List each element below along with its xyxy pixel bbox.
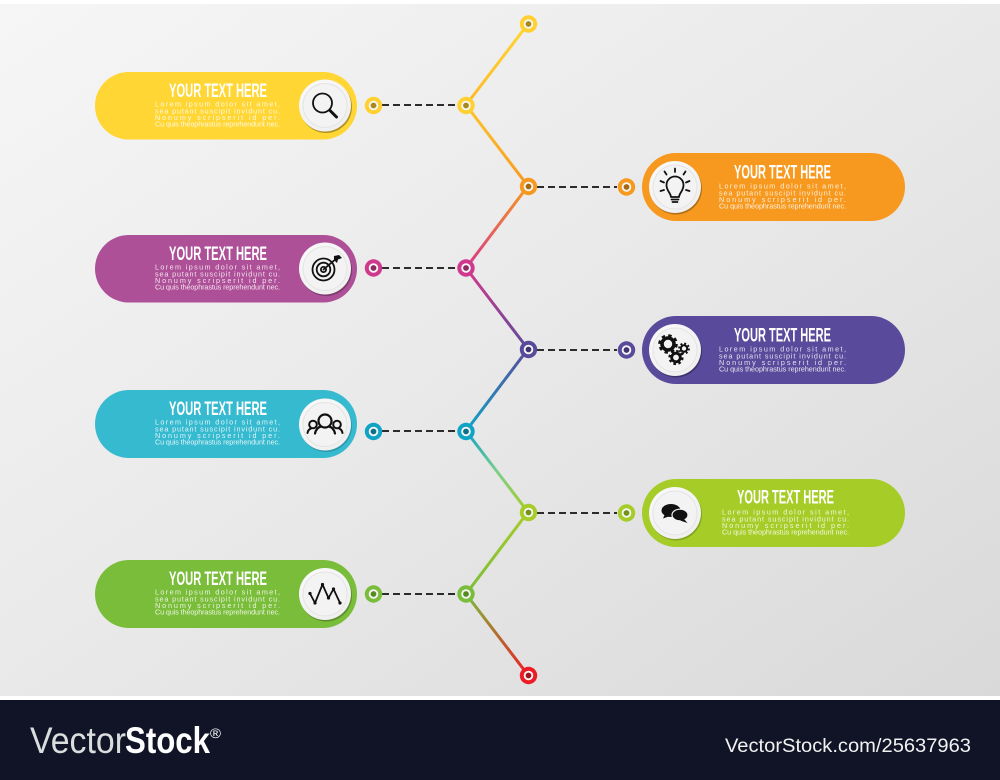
- text block: Lorem ipsum dolor sit amet,: [155, 100, 280, 108]
- text block: Nonumy scripserit id per.: [722, 521, 849, 530]
- node: trunk green: [457, 585, 475, 603]
- text block: Nonumy scripserit id per.: [719, 358, 846, 367]
- node: outer lime: [618, 504, 635, 522]
- panel: orange idea: [642, 153, 905, 221]
- node: outer teal: [365, 423, 382, 440]
- icon: magnifier: [299, 80, 352, 133]
- text block: Lorem ipsum dolor sit amet,: [155, 588, 280, 596]
- text block: Nonumy scripserit id per.: [719, 195, 846, 204]
- icon: gears: [649, 324, 702, 378]
- text block: Lorem ipsum dolor sit amet,: [155, 262, 280, 272]
- text block: Cu quis theophrastus reprehendunt nec.: [155, 282, 280, 292]
- panel: violet settings: [642, 316, 905, 384]
- node: outer orange: [618, 178, 635, 196]
- text block: [155, 262, 280, 292]
- node: outer magenta: [365, 259, 382, 277]
- text block: Cu quis theophrastus reprehendunt nec.: [719, 364, 846, 374]
- panel: lime chat: [642, 479, 905, 547]
- text block: Nonumy scripserit id per.: [155, 276, 280, 285]
- text block: [719, 182, 846, 210]
- icon: target: [299, 242, 352, 296]
- node: trunk orange: [520, 178, 537, 195]
- icon: speech bubbles: [649, 487, 702, 540]
- node: outer yellow: [365, 97, 382, 114]
- footer logo: [30, 720, 222, 761]
- node: bottom red: [520, 667, 537, 684]
- heading: YOUR TEXT HERE: [169, 243, 267, 265]
- footer logo: Stock: [125, 720, 210, 761]
- heading: YOUR TEXT HERE: [737, 486, 834, 508]
- node: outer violet: [618, 341, 635, 359]
- dashed connectors: [382, 105, 617, 594]
- node: trunk magenta: [457, 259, 475, 277]
- heading: YOUR TEXT HERE: [169, 568, 267, 590]
- node: trunk yellow: [457, 97, 475, 114]
- footer image id: VectorStock.com/25637963: [725, 736, 971, 757]
- text block: Cu quis theophrastus reprehendunt nec.: [155, 120, 280, 128]
- heading: YOUR TEXT HERE: [169, 398, 267, 420]
- node: trunk lime: [520, 504, 537, 521]
- text block: Lorem ipsum dolor sit amet,: [719, 344, 846, 354]
- text block: sea putant suscipit invidunt cu.: [155, 106, 280, 116]
- heading: YOUR TEXT HERE: [734, 162, 831, 184]
- text block: Nonumy scripserit id per.: [155, 601, 280, 610]
- node: trunk violet: [520, 341, 537, 358]
- panel: purple target: [95, 235, 357, 302]
- text block: sea putant suscipit invidunt cu.: [155, 594, 280, 604]
- text block: Cu quis theophrastus reprehendunt nec.: [155, 608, 280, 616]
- panel: teal team: [95, 390, 357, 458]
- text block: [722, 508, 849, 536]
- icon: line chart: [299, 568, 352, 622]
- text block: Nonumy scripserit id per.: [155, 113, 280, 122]
- text block: sea putant suscipit invidunt cu.: [719, 352, 846, 360]
- footer logo: Vector: [30, 720, 126, 761]
- footer logo: ®: [210, 725, 222, 741]
- text block: Lorem ipsum dolor sit amet,: [722, 508, 849, 516]
- node: outer green: [365, 585, 382, 603]
- text block: sea putant suscipit invidunt cu.: [155, 424, 280, 434]
- timeline trunk: [466, 24, 528, 675]
- text block: Cu quis theophrastus reprehendunt nec.: [719, 202, 846, 210]
- text block: [155, 100, 280, 128]
- footer bar: [0, 700, 1000, 780]
- text block: Cu quis theophrastus reprehendunt nec.: [155, 438, 280, 446]
- text block: sea putant suscipit invidunt cu.: [155, 270, 280, 278]
- text block: [719, 344, 846, 374]
- text block: Lorem ipsum dolor sit amet,: [155, 418, 280, 426]
- icon: light bulb: [649, 161, 702, 214]
- text block: Cu quis theophrastus reprehendunt nec.: [722, 528, 849, 536]
- panel: yellow search: [95, 72, 357, 140]
- text block: [155, 588, 280, 616]
- text block: Nonumy scripserit id per.: [155, 431, 280, 440]
- node: top yellow: [520, 15, 537, 33]
- text block: sea putant suscipit invidunt cu.: [719, 188, 846, 198]
- heading: YOUR TEXT HERE: [169, 80, 267, 102]
- text block: sea putant suscipit invidunt cu.: [722, 514, 849, 524]
- icon: people: [299, 398, 352, 452]
- panel: green chart: [95, 560, 357, 628]
- heading: YOUR TEXT HERE: [734, 324, 831, 346]
- text block: Lorem ipsum dolor sit amet,: [719, 182, 846, 190]
- text block: [155, 418, 280, 446]
- node: trunk teal: [457, 423, 475, 440]
